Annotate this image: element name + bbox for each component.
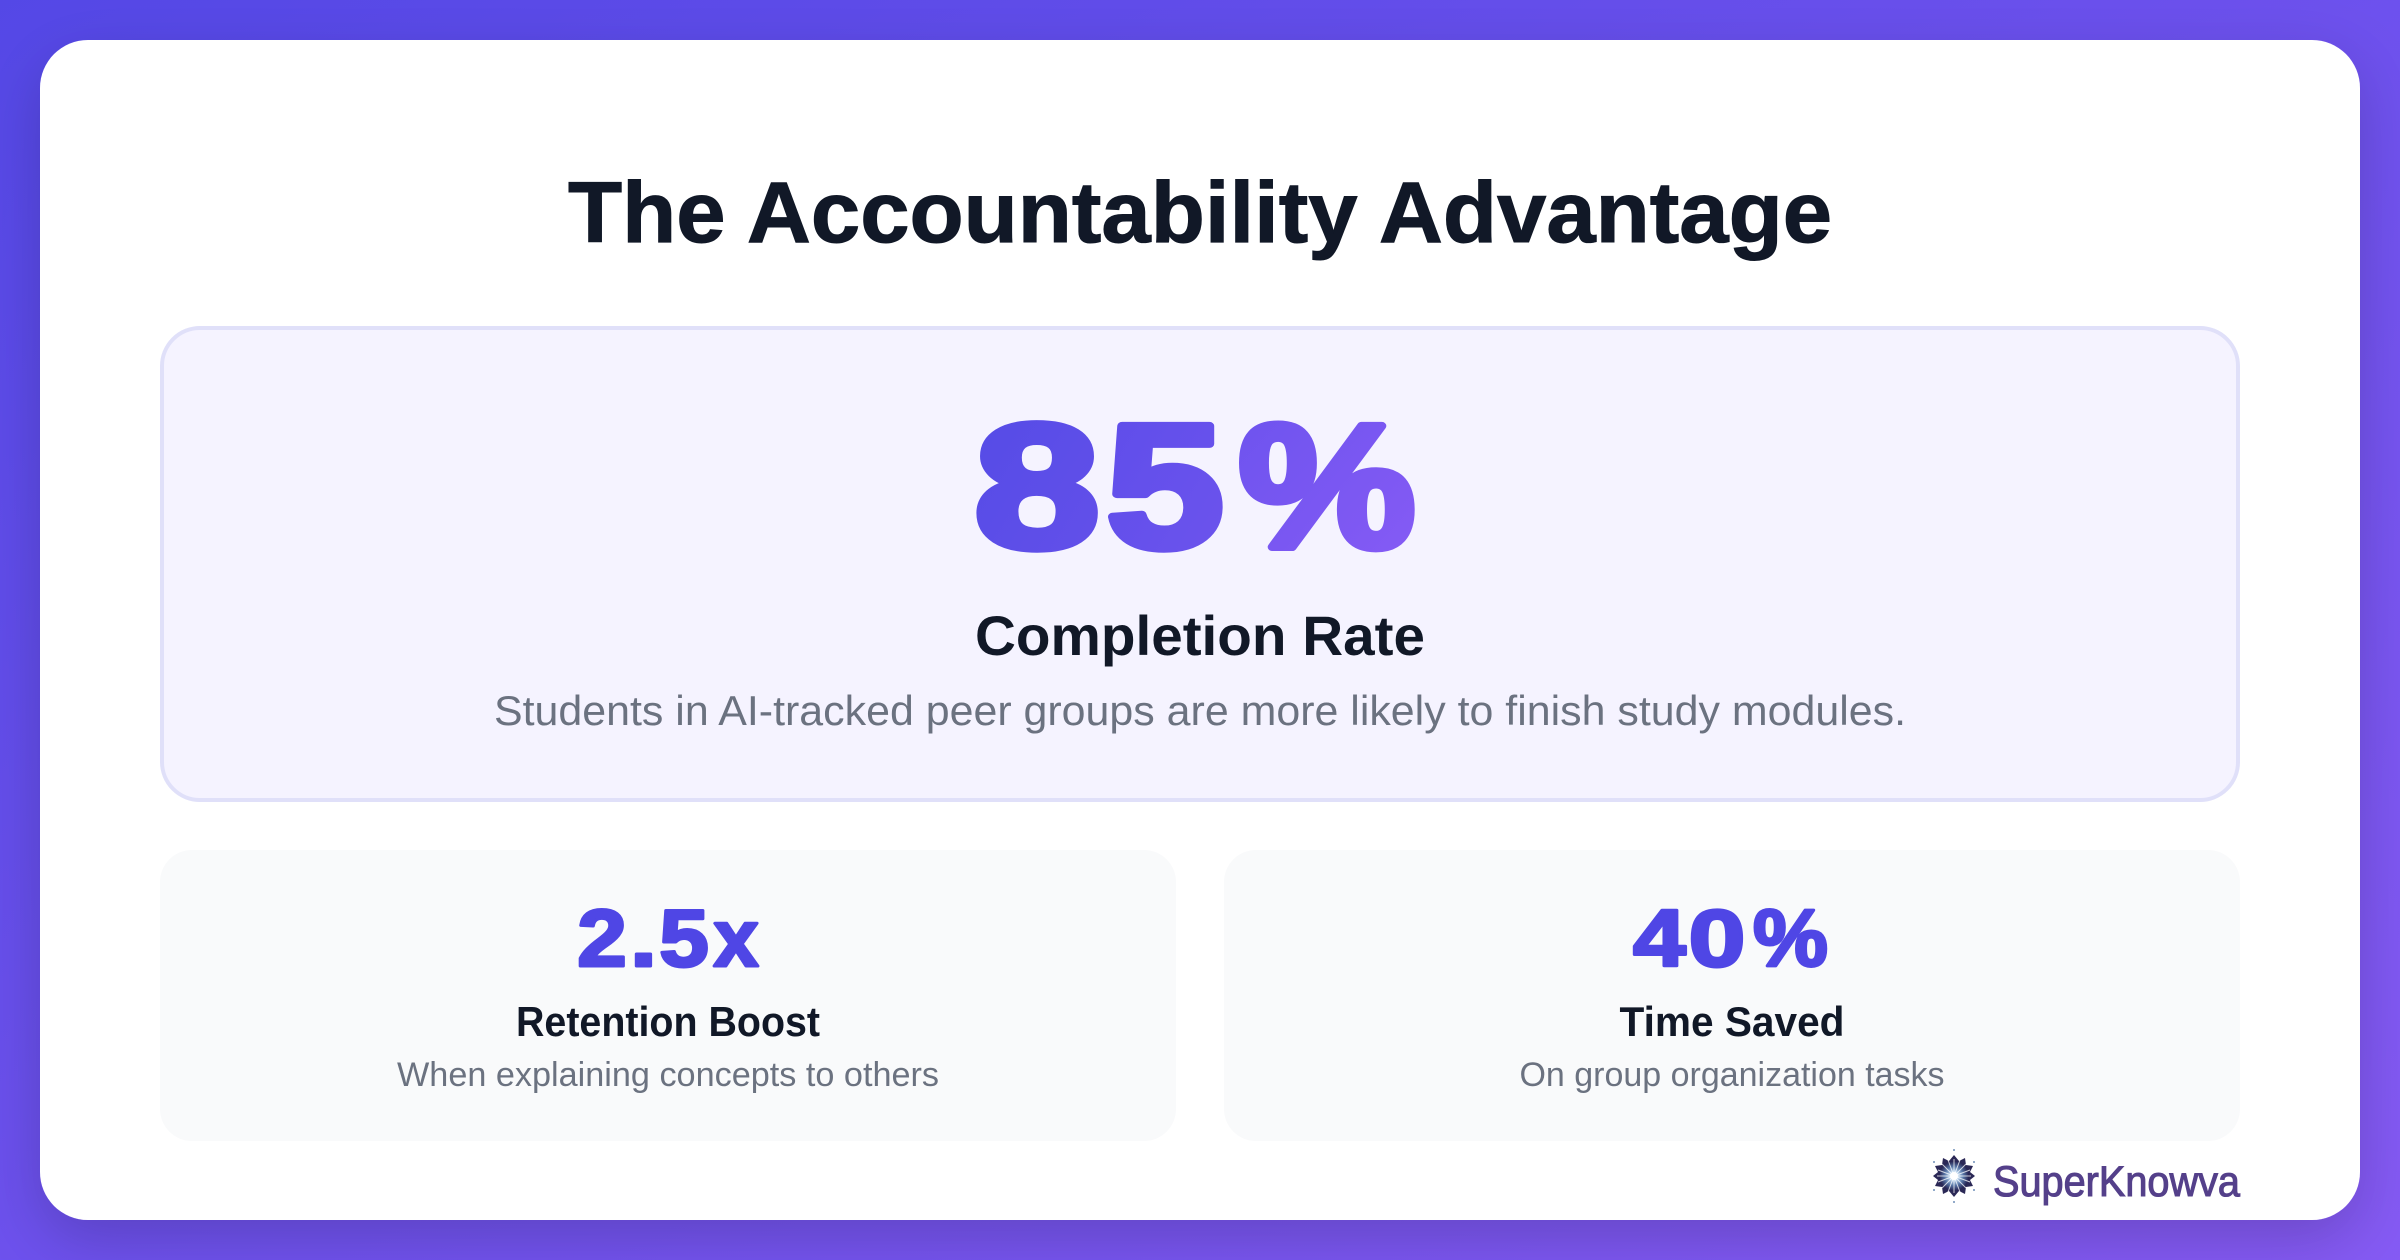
stat: 2.5x [577,893,759,984]
logo: SuperKnowva [1933,1149,2240,1206]
description: When explaining concepts to others [397,1056,939,1094]
description: On group organization tasks [1520,1056,1944,1094]
title: The Accountability Advantage [568,165,1832,261]
stat: 85%: 8 [974,388,1100,584]
panel: completion rate [162,328,2238,800]
icon: star emblem [1933,1149,1975,1203]
stat: 2.5x: 2 [577,894,627,984]
stat: 40% [1633,892,1828,984]
label: completion rate: Completion Rate [975,604,1425,667]
label: time saved: Time Saved [1620,998,1844,1045]
stat: 2.5x: 5 [659,894,709,984]
stat: 85% [974,388,1415,585]
stat: 40%: % [1753,892,1828,984]
panel: time saved [1224,850,2240,1141]
stat: 40%: 4 [1633,892,1686,983]
wordmark: SuperKnowva [1993,1158,2240,1206]
stat: 85%: % [1239,388,1415,584]
description: Students in AI-tracked peer groups are more likely to finish study modules. [494,687,1906,734]
stat: 2.5x: x [713,894,759,984]
stat: 2.5x: . [630,893,657,983]
stat: 40%: 0 [1689,893,1745,984]
panel: retention boost [160,850,1176,1141]
label: retention boost: Retention Boost [516,998,820,1045]
stat: 85%: 5 [1106,389,1224,585]
